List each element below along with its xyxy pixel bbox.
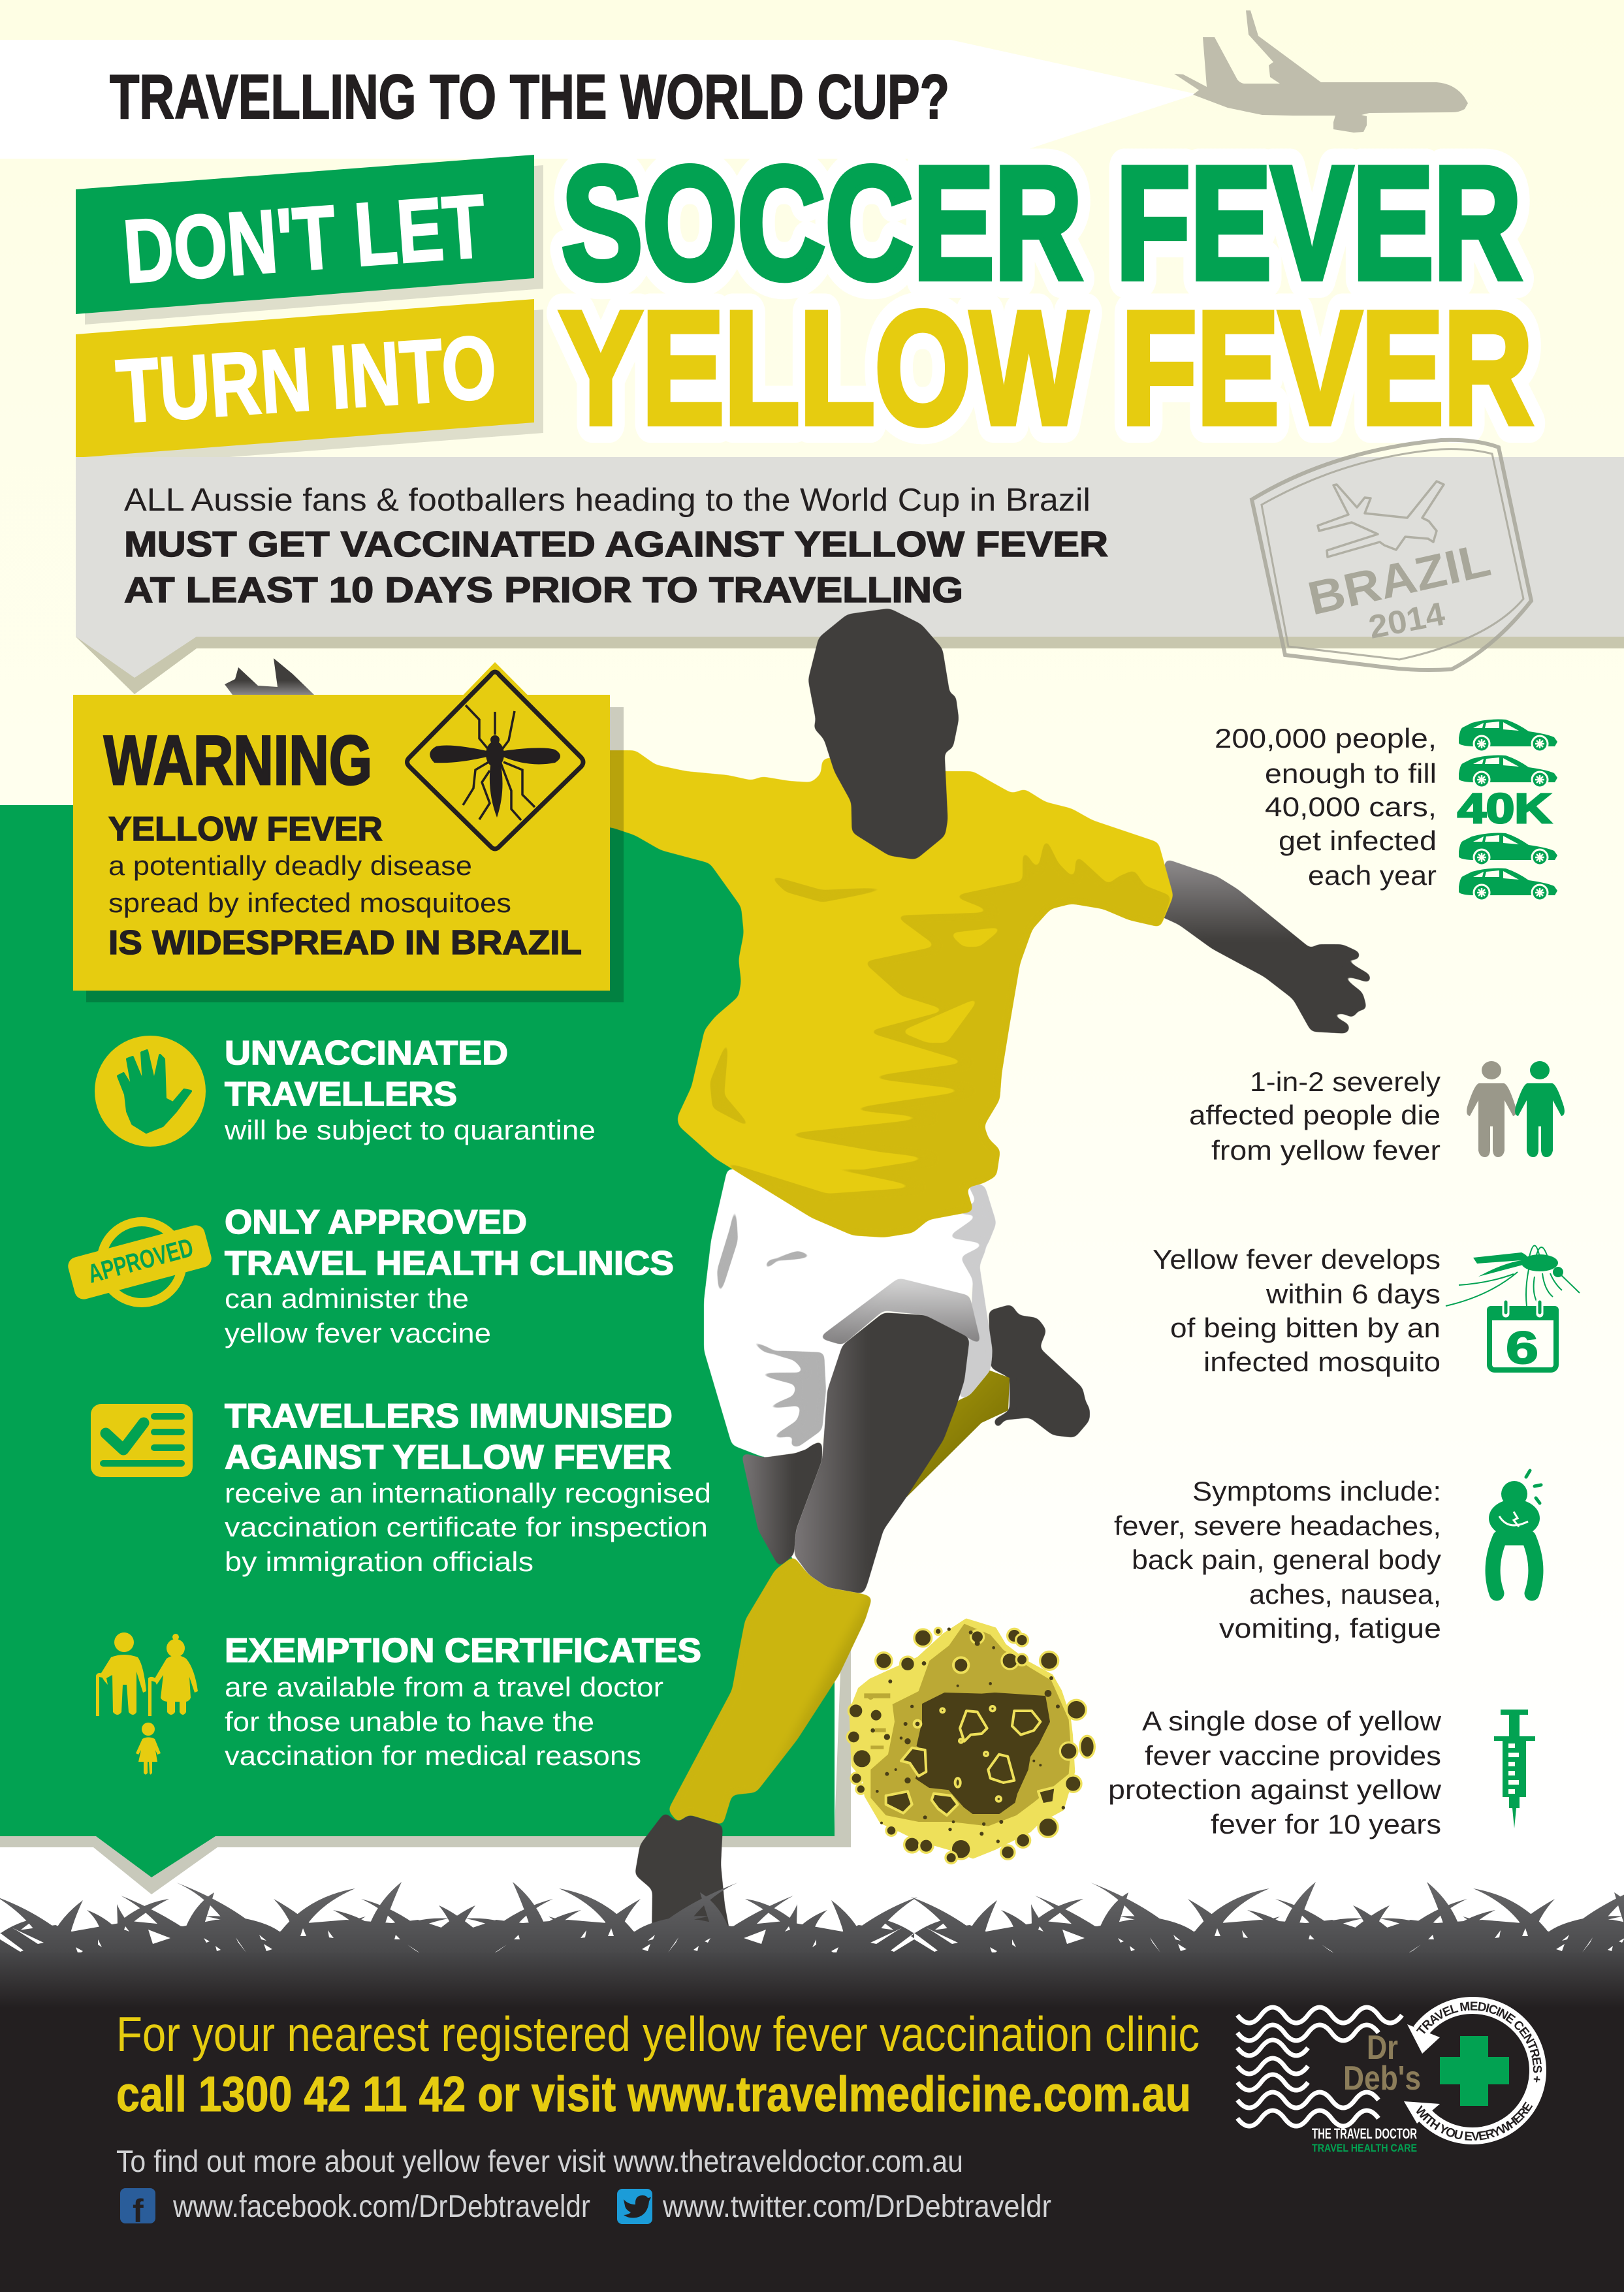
footer <box>0 1952 1624 2292</box>
icon: mosquito warning diamond <box>398 662 594 861</box>
list item: immunised travellers: TRAVELLERS IMMUNISED <box>225 1397 673 1435</box>
list item: immunised travellers <box>91 1397 711 1577</box>
front thigh <box>794 1313 970 1594</box>
grass <box>0 1882 1624 1959</box>
stat: mortality: 1-in-2 severely <box>1250 1066 1441 1097</box>
more information line: To find out more about yellow fever visit www.thetraveldoctor.com.au <box>116 2144 963 2178</box>
stat: vaccine protection: fever for 10 years <box>1211 1809 1441 1839</box>
back sock <box>906 1370 1010 1497</box>
icon: twitter <box>617 2189 652 2224</box>
notice text <box>124 483 1108 610</box>
stat: symptoms: Symptoms include: <box>1192 1476 1441 1506</box>
head and neck <box>809 609 958 859</box>
icon: cars with 40K: 40K <box>1457 785 1552 832</box>
stat: vaccine protection: protection against yellow <box>1108 1774 1442 1805</box>
stat: infections per year: 200,000 people, <box>1215 723 1437 754</box>
back thigh <box>741 1440 822 1567</box>
twitter link: www.twitter.com/DrDebtraveldr <box>662 2189 1051 2224</box>
logo: Dr Deb's: THE TRAVEL DOCTOR <box>1312 2125 1417 2142</box>
stat: symptoms: back pain, general body <box>1132 1544 1441 1575</box>
list item: approved clinics: ONLY APPROVED <box>225 1203 527 1241</box>
icon: two people <box>1467 1061 1565 1157</box>
stat: vaccine protection: A single dose of yellow <box>1142 1706 1442 1736</box>
stat: symptoms <box>1114 1471 1541 1644</box>
logo: Dr Deb's: TRAVEL MEDICINE CENTRES + <box>1416 2002 1542 2082</box>
clinic call to action: For your nearest registered yellow fever vaccination clinic <box>116 2007 1200 2061</box>
icon: mosquito on calendar <box>1446 1246 1580 1373</box>
icon: facebook <box>120 2188 155 2229</box>
notice text: MUST GET VACCINATED AGAINST YELLOW FEVER <box>124 524 1108 564</box>
stat: vaccine protection: fever vaccine provides <box>1145 1740 1441 1771</box>
back boot <box>989 1304 1090 1438</box>
ribbon: turn into <box>76 299 543 468</box>
left hand <box>225 658 314 695</box>
ribbon: turn into: TURN INTO <box>114 317 500 442</box>
icon: sick person <box>1489 1471 1541 1593</box>
list item: approved clinics: TRAVEL HEALTH CLINICS <box>225 1245 674 1282</box>
stat: mortality: from yellow fever <box>1211 1135 1441 1166</box>
stat: infections per year: 40,000 cars, <box>1265 791 1437 822</box>
stat: infections per year: each year <box>1308 860 1437 891</box>
warning text <box>108 810 582 962</box>
warning text: YELLOW FEVER <box>108 810 383 848</box>
clinic call to action <box>116 2007 1200 2122</box>
list item: exemption certificates: are available from a travel doctor <box>225 1672 663 1702</box>
stat: onset within 6 days: Yellow fever develops <box>1153 1244 1441 1275</box>
warning text: spread by infected mosquitoes <box>108 887 511 918</box>
facebook link: www.facebook.com/DrDebtraveldr <box>172 2189 590 2224</box>
shorts <box>704 1169 996 1457</box>
logo: Dr Deb's: WITH YOU EVERYWHERE <box>1416 2101 1533 2141</box>
stat: mortality <box>1189 1061 1565 1166</box>
stamp: Brazil 2014: BRAZIL <box>1303 533 1495 626</box>
list item: exemption certificates: for those unable to have the <box>225 1706 594 1737</box>
icon: mosquito on calendar: 6 <box>1506 1322 1538 1373</box>
stat: vaccine protection <box>1108 1706 1535 1839</box>
stamp: Brazil 2014 <box>1252 440 1531 670</box>
list item: exemption certificates: EXEMPTION CERTIFICATES <box>225 1632 701 1670</box>
list item: immunised travellers: vaccination certificate for inspection <box>225 1512 708 1542</box>
list item: unvaccinated travellers <box>95 1034 596 1147</box>
icon: cars with 40K <box>1457 720 1557 900</box>
icon: elderly people and child <box>96 1632 198 1775</box>
stat: onset within 6 days: within 6 days <box>1266 1279 1441 1309</box>
logo: Dr Deb's: TRAVEL HEALTH CARE <box>1312 2142 1417 2154</box>
stamp: Brazil 2014: 2014 <box>1365 595 1448 646</box>
panel: warning box <box>73 662 624 1002</box>
icon: approved stamp: APPROVED <box>85 1233 197 1289</box>
list item: immunised travellers: by immigration officials <box>225 1546 533 1577</box>
question heading: TRAVELLING TO THE WORLD CUP? <box>110 62 949 132</box>
stat: infections per year: get infected <box>1279 825 1437 856</box>
player figure <box>225 609 1371 1933</box>
stat: symptoms: fever, severe headaches, <box>1114 1510 1441 1541</box>
list item: immunised travellers: receive an internationally recognised <box>225 1478 711 1508</box>
front sock <box>668 1556 872 1825</box>
stat: onset within 6 days: infected mosquito <box>1203 1346 1441 1377</box>
stat: symptoms: vomiting, fatigue <box>1219 1613 1441 1644</box>
icon: certificate <box>91 1404 193 1477</box>
title block <box>76 133 1533 468</box>
list item: approved clinics: can administer the <box>225 1283 469 1314</box>
list item: approved clinics: yellow fever vaccine <box>225 1318 491 1348</box>
list item: approved clinics <box>66 1203 674 1348</box>
list item: immunised travellers: AGAINST YELLOW FEVER <box>225 1439 671 1476</box>
list item: unvaccinated travellers: UNVACCINATED <box>225 1034 508 1072</box>
warning heading: WARNING <box>104 721 372 799</box>
stat: mortality: affected people die <box>1189 1100 1441 1130</box>
warning text: IS WIDESPREAD IN BRAZIL <box>108 924 582 962</box>
white arrow banner <box>0 40 1196 159</box>
right arm <box>1156 859 1371 1034</box>
clinic call to action: call 1300 42 11 42 or visit www.travelmedicine.com.au <box>116 2067 1191 2122</box>
ribbon: don't let <box>76 155 543 325</box>
notice text: ALL Aussie fans & footballers heading to the World Cup in Brazil <box>124 483 1091 518</box>
list item: unvaccinated travellers: will be subject to quarantine <box>224 1115 596 1145</box>
icon: facebook: f <box>133 2193 144 2229</box>
stat: symptoms: aches, nausea, <box>1249 1579 1441 1610</box>
list item: unvaccinated travellers: TRAVELLERS <box>225 1075 457 1113</box>
logo: Dr Deb's: Dr <box>1367 2029 1398 2067</box>
logo: Dr Deb's <box>1235 1997 1546 2154</box>
shirt <box>588 750 1173 1237</box>
logo: Dr Deb's: Deb's <box>1343 2060 1421 2097</box>
stat: infections per year: enough to fill <box>1265 758 1437 789</box>
front boot <box>635 1812 730 1933</box>
notice text: AT LEAST 10 DAYS PRIOR TO TRAVELLING <box>124 569 963 610</box>
stat: onset within 6 days: of being bitten by an <box>1170 1313 1441 1343</box>
icon: plane silhouette <box>1174 10 1468 133</box>
ribbon: don't let: DON'T LET <box>120 176 489 302</box>
stat: onset within 6 days <box>1153 1244 1580 1377</box>
warning text: a potentially deadly disease <box>108 850 472 881</box>
list item: exemption certificates: vaccination for medical reasons <box>225 1740 641 1771</box>
illustration: yellow fever virus <box>847 1621 1094 1864</box>
icon: stop hand <box>95 1036 206 1147</box>
stamp plane <box>1318 481 1444 557</box>
panel: green information panel <box>0 805 851 1894</box>
icon: approved stamp <box>66 1222 214 1303</box>
stat: infections per year <box>1215 720 1557 900</box>
icon: syringe <box>1494 1710 1535 1828</box>
grey notice banner <box>76 457 1624 694</box>
list item: exemption certificates <box>96 1632 701 1775</box>
